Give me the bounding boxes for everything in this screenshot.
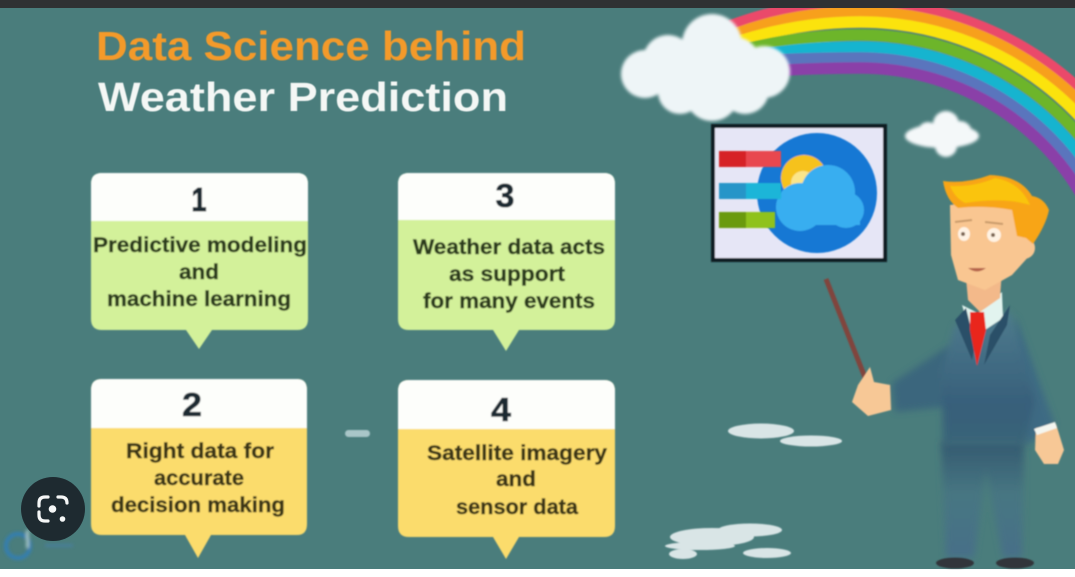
top bar bbox=[0, 0, 1075, 8]
card 1: 1 bbox=[192, 181, 206, 218]
tie bbox=[970, 312, 986, 366]
card 1 bbox=[91, 173, 308, 349]
brows bbox=[955, 220, 1003, 224]
legs bbox=[941, 442, 1024, 558]
card 4: Satellite imagery bbox=[427, 442, 607, 465]
hair bbox=[943, 175, 1049, 244]
watermark logo bbox=[6, 530, 73, 558]
card 4: sensor data bbox=[456, 496, 578, 519]
image search button bbox=[21, 477, 85, 541]
card 3 bbox=[398, 173, 615, 351]
board frame bbox=[713, 126, 885, 260]
right arm bbox=[1010, 315, 1055, 445]
left arm (pointer) bbox=[892, 345, 965, 412]
weather circle bbox=[757, 133, 877, 253]
presentation board bbox=[713, 126, 885, 260]
neck bbox=[966, 270, 1002, 312]
card 4: 4 bbox=[491, 391, 512, 428]
card 2: accurate bbox=[154, 467, 244, 490]
ear bbox=[1013, 237, 1035, 259]
card 2 bbox=[91, 379, 307, 558]
pointer stick bbox=[826, 279, 866, 380]
card 1: Predictive modeling bbox=[93, 234, 307, 257]
card 3: Weather data acts bbox=[413, 236, 605, 259]
ground clouds lower bbox=[665, 524, 791, 559]
shoes bbox=[936, 558, 1034, 568]
mouth bbox=[968, 268, 986, 272]
hands bbox=[852, 367, 1064, 464]
card 3: as support bbox=[449, 263, 565, 286]
card 2: Right data for bbox=[126, 440, 274, 463]
title line 1: Data Science behind bbox=[96, 23, 526, 69]
card 3: 3 bbox=[496, 177, 514, 214]
card 2: decision making bbox=[111, 494, 285, 517]
small cloud bbox=[905, 111, 979, 157]
face bbox=[950, 198, 1030, 290]
jacket bbox=[942, 312, 1035, 445]
title line 2: Weather Prediction bbox=[98, 74, 508, 120]
card 2: 2 bbox=[182, 386, 202, 423]
ground clouds upper bbox=[728, 424, 842, 446]
title bbox=[96, 23, 526, 120]
large cloud bbox=[621, 14, 790, 121]
presenter character bbox=[852, 175, 1064, 568]
legend rows bbox=[719, 151, 781, 228]
card 4: and bbox=[496, 468, 536, 491]
card 1: and bbox=[179, 261, 219, 284]
collar bbox=[962, 292, 1003, 330]
card 1: machine learning bbox=[107, 288, 291, 311]
dash between cards bbox=[345, 430, 370, 437]
lens icon bbox=[39, 497, 67, 522]
card 3: for many events bbox=[423, 290, 595, 313]
eyes bbox=[958, 227, 1001, 242]
rainbow bbox=[730, 3, 1075, 201]
card 4 bbox=[398, 380, 615, 559]
lapels bbox=[955, 305, 1010, 365]
